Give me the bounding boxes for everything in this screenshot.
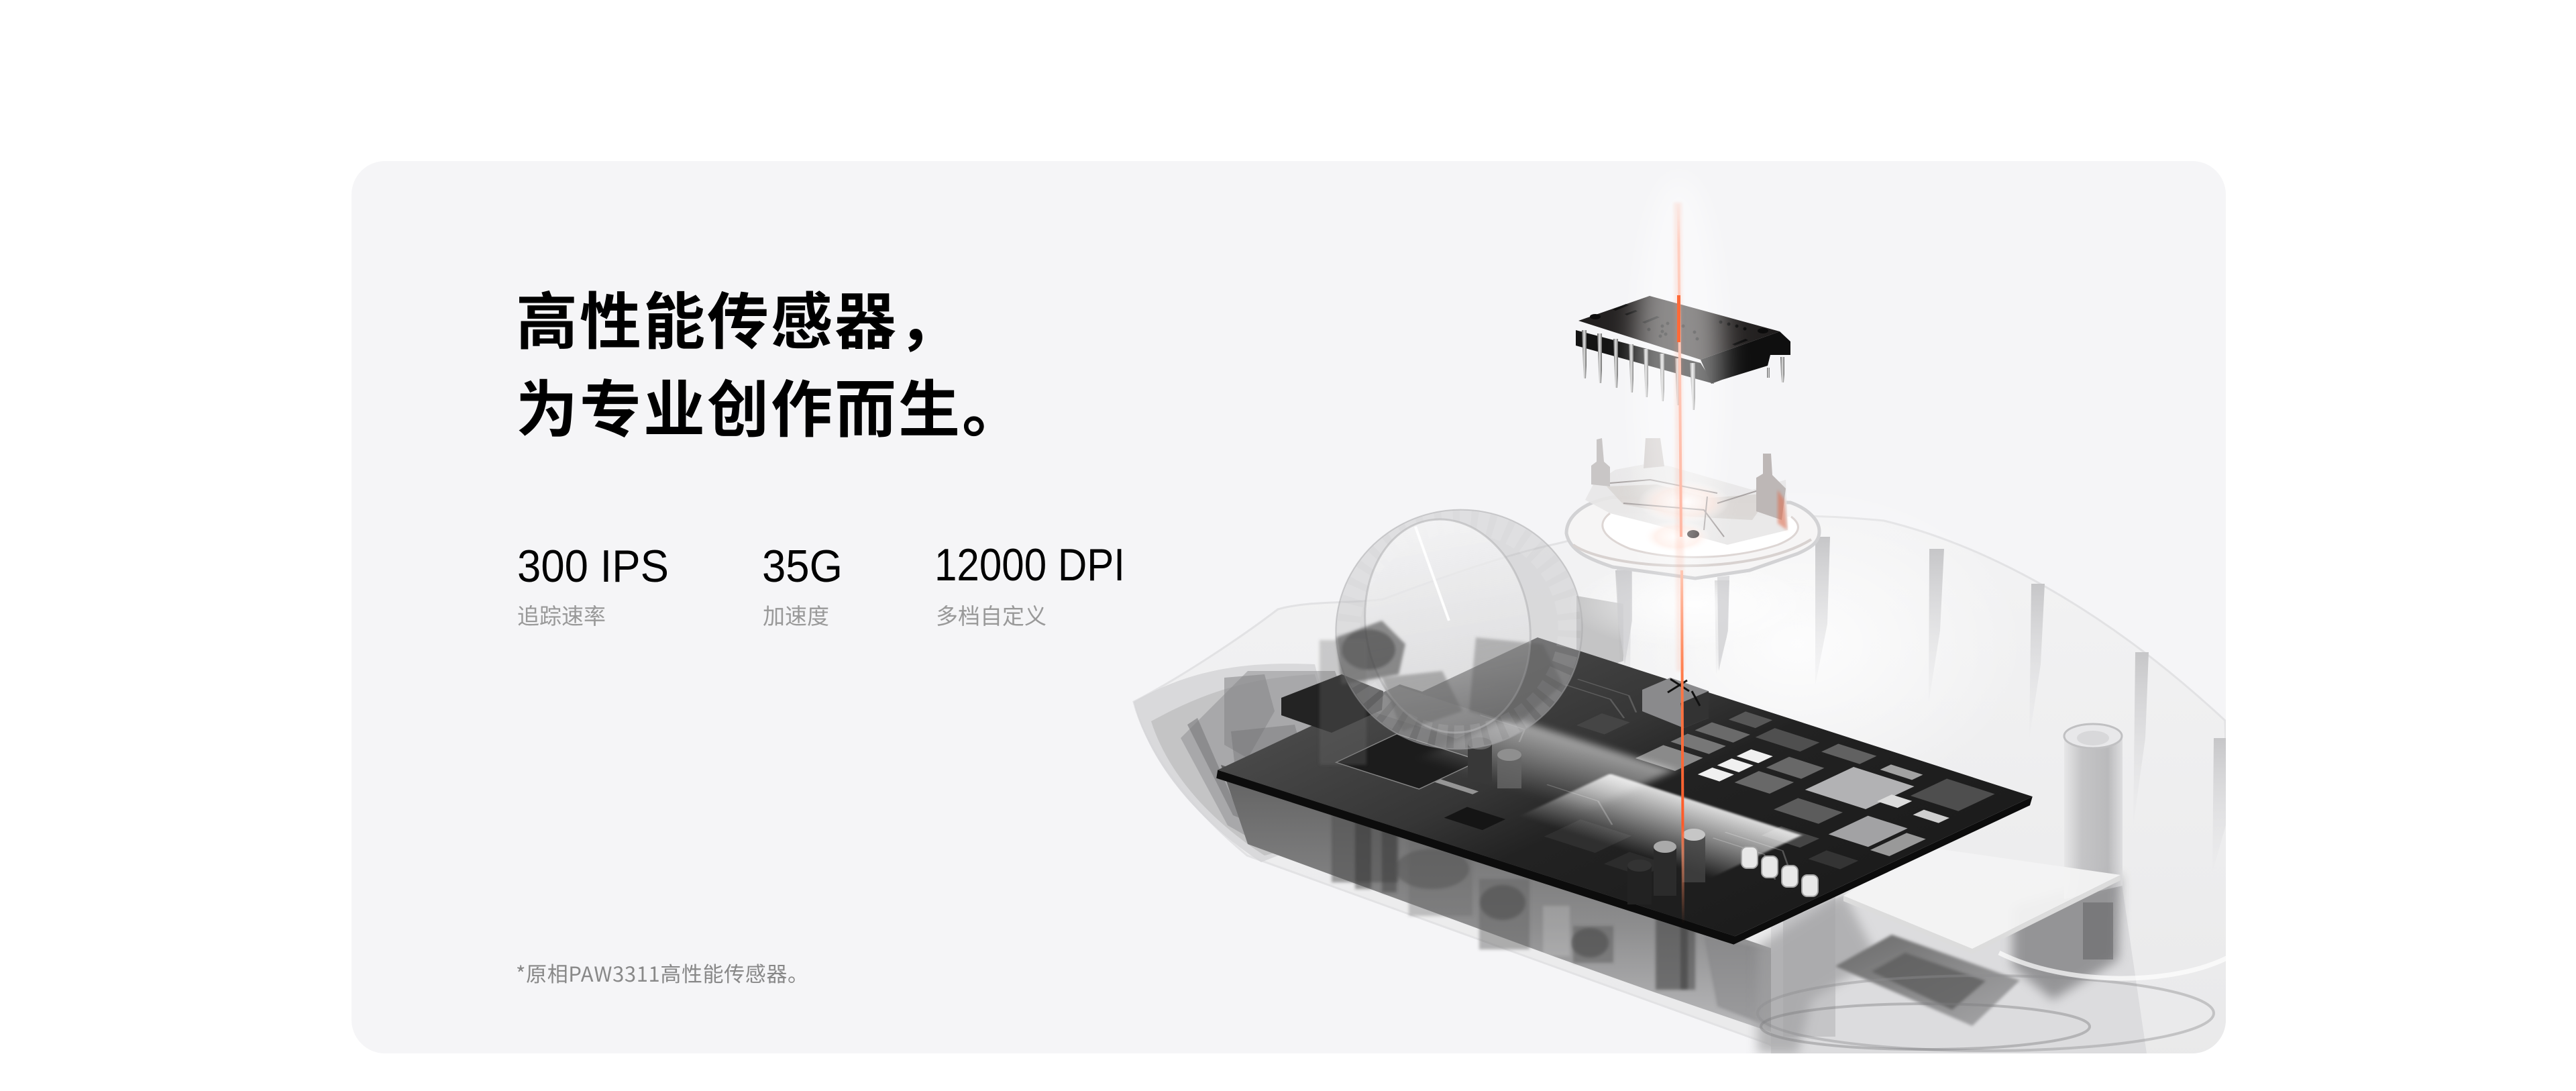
board window overlay	[1519, 774, 1802, 878]
heading	[516, 272, 1026, 450]
box behind wheel	[1576, 596, 1623, 663]
lower right: hidden area	[1758, 724, 2231, 1053]
lens posts	[1591, 438, 1610, 486]
stat: tracking speed	[517, 541, 669, 631]
under-board columns	[1330, 815, 1771, 1024]
beam lower	[1680, 570, 1684, 924]
heading: 高性能传感器，	[516, 272, 962, 362]
cavity under white plate	[1771, 875, 2147, 1053]
stat: acceleration: 35G	[762, 541, 843, 592]
rear post	[2064, 735, 2123, 899]
chip top	[1578, 296, 1780, 360]
board edge	[1216, 770, 2033, 945]
lens cage	[1585, 463, 1788, 545]
sensor switch on board	[1642, 678, 1709, 728]
heading: 为专业创作而生。	[516, 360, 1026, 450]
under-board cavity	[1221, 765, 1784, 1037]
beam on chip	[1677, 295, 1680, 342]
chip pins	[1582, 330, 1784, 410]
stat: acceleration	[762, 541, 843, 631]
mouse shell	[1134, 516, 2234, 1074]
sensor chip	[1576, 296, 1790, 410]
footnote: *原相PAW3311高性能传感器。	[516, 957, 808, 988]
stat: resolution: 12000 DPI	[934, 539, 1125, 590]
board left haze	[1354, 686, 1499, 739]
laser beam	[1635, 174, 1723, 924]
board chips	[1335, 711, 1995, 872]
translucent cylinder	[1783, 896, 1835, 1037]
base ring	[1758, 976, 2214, 1051]
wheel mechanism	[1320, 621, 1563, 765]
panel: sensor card	[352, 161, 2226, 1053]
stat: tracking speed: 300 IPS	[517, 541, 669, 592]
scroll wheel	[1310, 484, 1608, 775]
white plate	[1843, 867, 2120, 947]
illustration: transparent mouse with exploded sensor	[1134, 174, 2234, 1074]
circuit board	[1207, 630, 2042, 945]
shell ribs	[1615, 537, 2226, 828]
stat: resolution: 多档自定义	[936, 599, 1046, 631]
lens base	[1566, 497, 1819, 578]
chip front-left side	[1576, 330, 1714, 384]
stat: tracking speed: 追踪速率	[517, 599, 606, 631]
chip right side	[1701, 331, 1790, 384]
chip marks	[1590, 304, 1768, 346]
board traces	[1480, 679, 1788, 880]
beam upper	[1677, 203, 1682, 537]
lens column haze	[1566, 557, 1821, 651]
lens supports	[1617, 567, 1632, 664]
memory module	[1835, 935, 2020, 1026]
stat: acceleration: 加速度	[763, 599, 829, 631]
stat: resolution	[934, 539, 1125, 631]
capacitors	[1468, 737, 1818, 904]
nose layers	[1134, 664, 1337, 862]
board surface	[1218, 630, 2033, 936]
laser glow	[1635, 174, 1723, 577]
lens dark spot	[1687, 530, 1699, 538]
board mid haze	[1417, 717, 1674, 813]
black block on the board	[1281, 674, 1383, 733]
sensor lens plate	[1566, 438, 1821, 671]
shell bright haze	[1724, 600, 1872, 702]
